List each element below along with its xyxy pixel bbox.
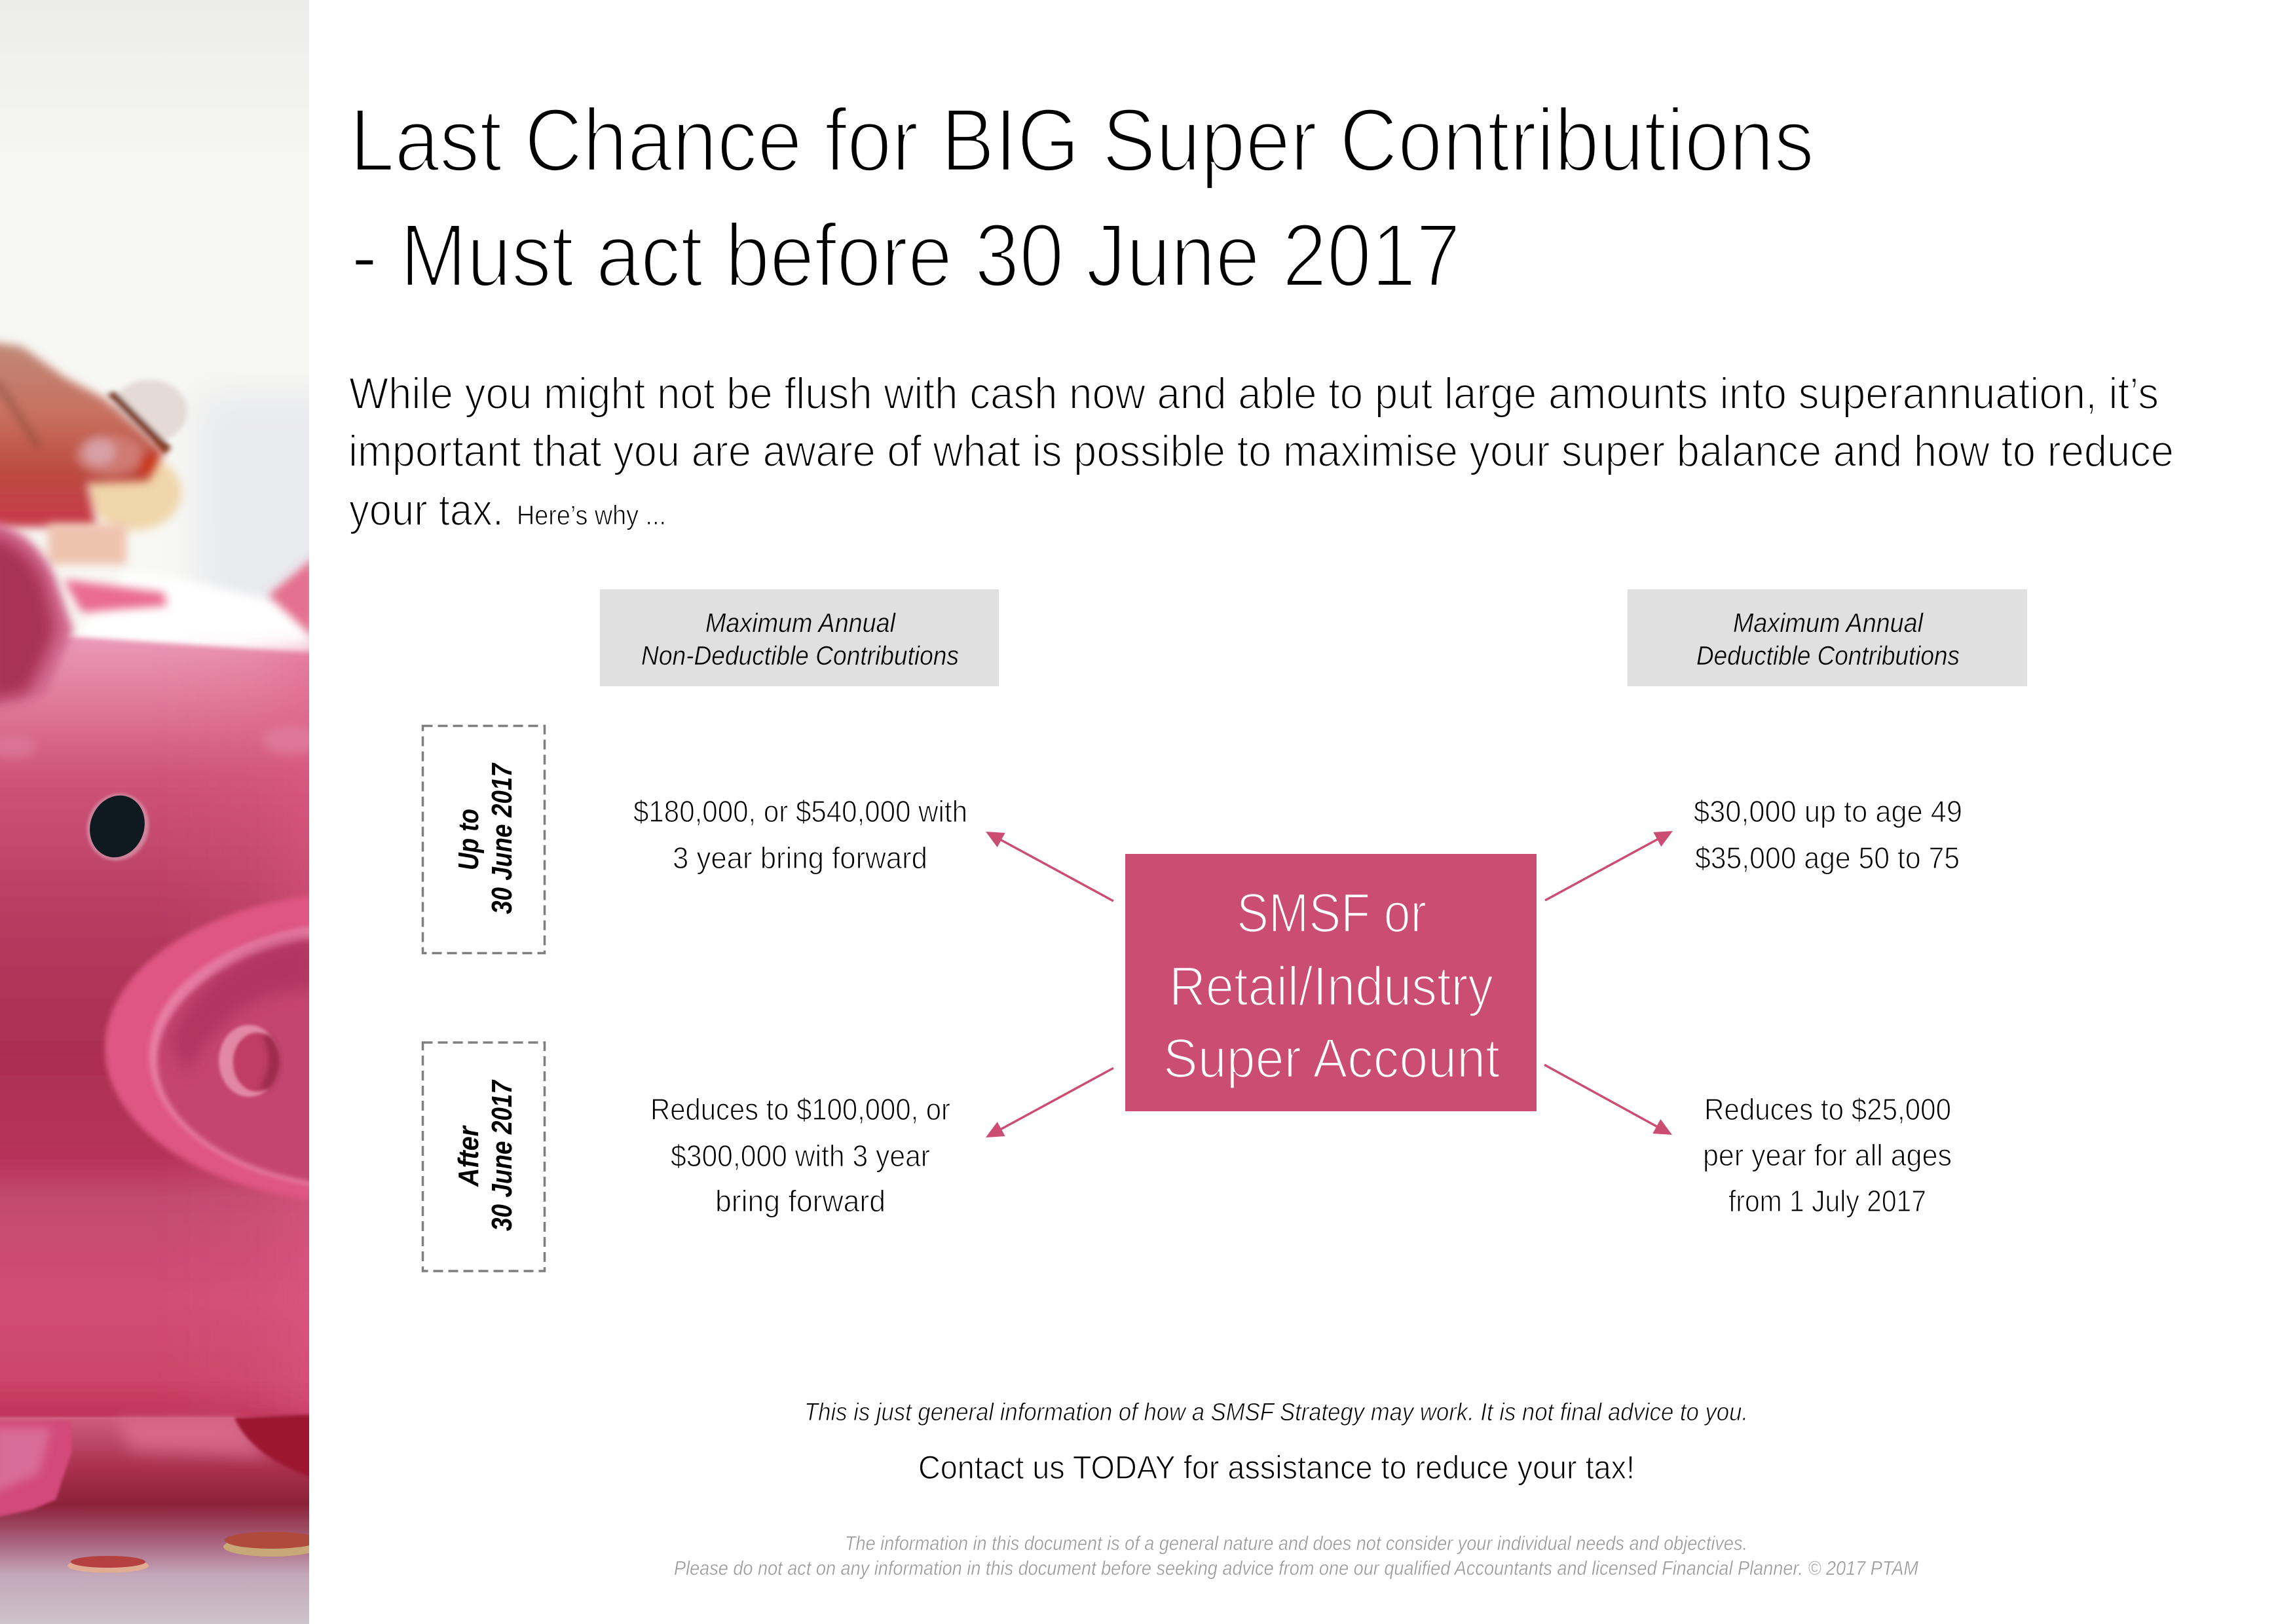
arrow: to top right — [1545, 831, 1673, 900]
label: after 30 June 2017: After — [453, 1124, 485, 1187]
label: up to 30 June 2017: 30 June 2017 — [486, 762, 518, 914]
arrow: to top left — [986, 832, 1113, 901]
title: - Must act before 30 June 2017 — [351, 206, 1461, 306]
icon: pig back and top slot highlight — [48, 524, 314, 661]
central box: SMSF or Retail/Industry Super Account: Retail/Industry — [1169, 955, 1493, 1017]
text: deductible after June 2017: per year for all ages — [1703, 1138, 1952, 1172]
title: Last Chance for BIG Super Contributions — [350, 90, 1814, 191]
label: up to 30 June 2017: Up to — [453, 809, 485, 870]
header: deductible contributions — [1628, 589, 2027, 686]
central box: SMSF or Retail/Industry Super Account — [1125, 854, 1537, 1111]
text: deductible up to June 2017: $30,000 up to age 49 — [1694, 794, 1962, 828]
icon: lower coin — [87, 454, 181, 530]
text: non-deductible after June 2017 — [650, 1092, 950, 1218]
intro paragraph: Here’s why ... — [517, 500, 666, 530]
icon: pig body — [0, 634, 309, 1418]
icon: belly and floor shadow — [0, 1418, 309, 1624]
icon: right coin — [223, 1532, 309, 1557]
text: non-deductible after June 2017: Reduces to $100,000, or — [650, 1092, 950, 1126]
text: non-deductible up to June 2017 — [633, 794, 967, 875]
header: non-deductible contributions: Maximum Annual — [705, 608, 897, 638]
icon: pig left foot — [0, 1421, 72, 1518]
note: general information: This is just general information of how a SMSF Strategy may work. It is not final advice to you. — [804, 1399, 1748, 1426]
title — [350, 90, 1814, 306]
text: non-deductible up to June 2017: 3 year bring forward — [673, 841, 927, 875]
icon: snout — [102, 895, 309, 1200]
icon: upper coin — [107, 380, 187, 454]
label: up to 30 June 2017 — [423, 726, 545, 953]
text: deductible up to June 2017: $35,000 age 50 to 75 — [1695, 841, 1960, 875]
central box: SMSF or Retail/Industry Super Account: Super Account — [1163, 1027, 1500, 1089]
label: after 30 June 2017: 30 June 2017 — [486, 1079, 518, 1231]
icon: eye — [85, 792, 151, 862]
text: non-deductible after June 2017: bring forward — [715, 1184, 886, 1218]
photo: piggy bank with hand and coins — [0, 0, 309, 1624]
intro paragraph: important that you are aware of what is possible to maximise your super balance and how to reduce — [348, 426, 2174, 476]
label: after 30 June 2017 — [423, 1043, 545, 1271]
text: deductible after June 2017: from 1 July 2017 — [1728, 1184, 1926, 1218]
intro paragraph: While you might not be flush with cash now and able to put large amounts into superannuation, it’s — [349, 369, 2159, 418]
text: deductible after June 2017 — [1703, 1092, 1952, 1218]
icon: pig ear — [0, 521, 73, 707]
header: non-deductible contributions — [600, 589, 999, 686]
intro paragraph: your tax. — [349, 485, 504, 535]
intro paragraph — [348, 369, 2174, 535]
header: deductible contributions: Maximum Annual — [1733, 608, 1924, 638]
icon: pig right foot — [234, 1414, 314, 1479]
header: non-deductible contributions: Non-Deductible Contributions — [641, 640, 959, 671]
disclaimer: Please do not act on any information in this document before seeking advice from one our qualified Accountants and licensed Financial Planner. © 2017 PTAM — [674, 1557, 1918, 1579]
text: non-deductible after June 2017: $300,000 with 3 year — [671, 1139, 930, 1173]
header: deductible contributions: Deductible Contributions — [1696, 640, 1960, 671]
text: deductible after June 2017: Reduces to $25,000 — [1704, 1092, 1951, 1126]
disclaimer: The information in this document is of a general nature and does not consider your individual needs and objectives. — [845, 1532, 1747, 1555]
icon: left coin — [67, 1556, 149, 1573]
central box: SMSF or Retail/Industry Super Account: SMSF or — [1237, 882, 1427, 944]
icon: hand — [0, 341, 164, 527]
text: deductible up to June 2017 — [1694, 794, 1962, 875]
arrow: to bottom right — [1544, 1065, 1672, 1135]
arrow: to bottom left — [986, 1068, 1113, 1137]
disclaimer — [674, 1532, 1918, 1579]
call to action: Contact us TODAY for assistance to reduce your tax! — [918, 1449, 1635, 1486]
text: non-deductible up to June 2017: $180,000, or $540,000 with — [633, 794, 967, 828]
